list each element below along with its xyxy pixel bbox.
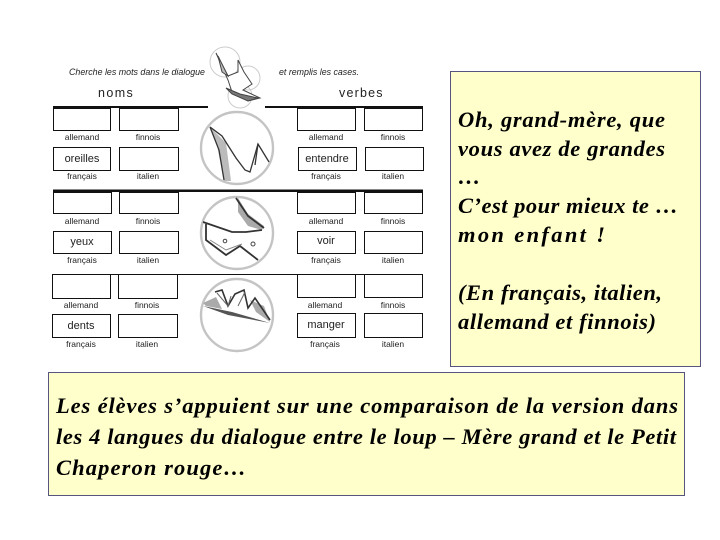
dialogue text: C’est pour mieux te … xyxy=(458,193,678,218)
section: ears and hearing xyxy=(53,106,424,181)
section: ears and hearing: italien xyxy=(137,171,159,181)
section: eyes and sight: italien xyxy=(137,255,159,265)
explanation text xyxy=(55,393,678,480)
section: eyes and sight: français xyxy=(67,255,97,265)
section: teeth and eating: allemand xyxy=(308,300,343,310)
section: eyes and sight: allemand xyxy=(65,216,100,226)
section: ears and hearing: entendre xyxy=(305,153,349,165)
section: teeth and eating xyxy=(52,274,423,349)
section: eyes and sight xyxy=(53,190,423,265)
section: eyes and sight: allemand xyxy=(309,216,344,226)
icon: wolf eye xyxy=(201,197,273,269)
heading: noms: noms xyxy=(98,86,134,100)
section: ears and hearing: français xyxy=(311,171,341,181)
section: teeth and eating: finnois xyxy=(135,300,159,310)
dialogue text: … xyxy=(458,164,480,189)
section: ears and hearing: finnois xyxy=(136,132,160,142)
dialogue text: (En français, italien, xyxy=(458,280,662,305)
explanation text: les 4 langues du dialogue entre le loup – Mère grand et le Petit xyxy=(56,424,677,449)
dialogue text xyxy=(458,107,678,334)
icon: wolf head xyxy=(210,47,260,108)
icon: wolf ear xyxy=(201,112,273,184)
icon: wolf teeth xyxy=(201,279,273,351)
section: teeth and eating: français xyxy=(310,339,340,349)
section: teeth and eating: allemand xyxy=(64,300,99,310)
worksheet instruction xyxy=(69,67,359,78)
explanation text: Chaperon rouge… xyxy=(56,455,246,480)
heading: verbes: verbes xyxy=(339,86,384,100)
section: eyes and sight: voir xyxy=(317,235,335,247)
section: teeth and eating: français xyxy=(66,339,96,349)
section: ears and hearing: italien xyxy=(382,171,404,181)
section: eyes and sight: finnois xyxy=(136,216,160,226)
dialogue text: mon enfant ! xyxy=(458,222,605,247)
dialogue text: vous avez de grandes xyxy=(458,136,665,161)
dialogue text: Oh, grand-mère, que xyxy=(458,107,665,132)
section: ears and hearing: allemand xyxy=(309,132,344,142)
section: teeth and eating: manger xyxy=(307,319,345,331)
explanation text: Les élèves s’appuient sur une comparaison de la version dans xyxy=(55,393,678,418)
section: eyes and sight: yeux xyxy=(70,236,94,248)
panel: explanation xyxy=(48,372,684,496)
dialogue text: allemand et finnois) xyxy=(458,309,656,334)
section: ears and hearing: oreilles xyxy=(65,153,100,165)
section: eyes and sight: français xyxy=(311,255,341,265)
section: ears and hearing: français xyxy=(67,171,97,181)
panel: dialogue xyxy=(450,72,700,366)
section: ears and hearing: allemand xyxy=(65,132,100,142)
worksheet instruction: Cherche les mots dans le dialogue xyxy=(69,67,205,78)
worksheet instruction: et remplis les cases. xyxy=(279,67,359,78)
section: teeth and eating: dents xyxy=(68,320,95,332)
section: teeth and eating: finnois xyxy=(381,300,405,310)
section: eyes and sight: finnois xyxy=(381,216,405,226)
section: teeth and eating: italien xyxy=(136,339,158,349)
section: teeth and eating: italien xyxy=(382,339,404,349)
section: eyes and sight: italien xyxy=(382,255,404,265)
section: ears and hearing: finnois xyxy=(381,132,405,142)
